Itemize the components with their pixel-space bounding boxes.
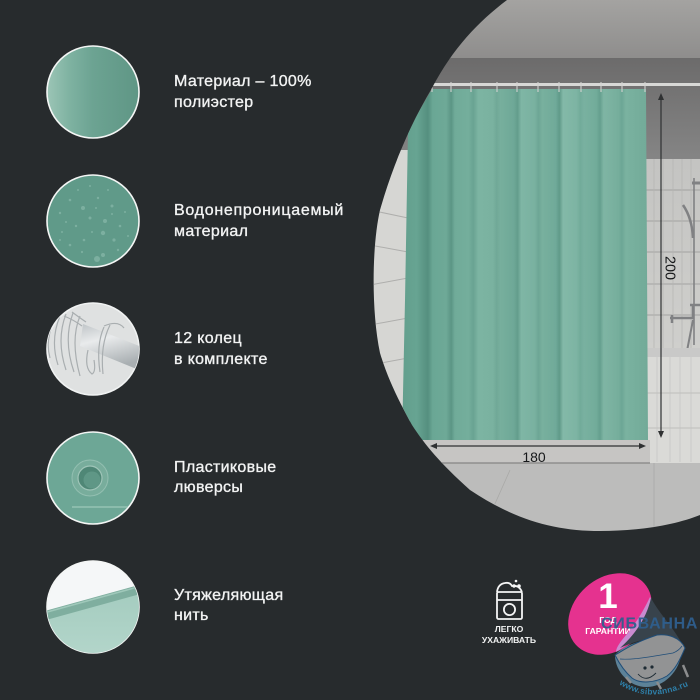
tiled wall left xyxy=(374,150,410,422)
ceiling xyxy=(450,0,700,59)
text: weighted thread: нить xyxy=(174,607,209,624)
curtain with pleats xyxy=(402,89,648,440)
text: material: полиэстер xyxy=(174,94,253,111)
logo name: СИБВАННА xyxy=(601,616,698,632)
floor xyxy=(442,463,700,531)
water drop on pink xyxy=(616,597,652,652)
icon: fabric swatch xyxy=(47,46,139,138)
text: guarantee: ГАРАНТИИ xyxy=(585,626,631,636)
icon: plastic eyelet xyxy=(47,432,139,524)
text: eyelets: люверсы xyxy=(174,479,243,496)
tub front under curtain xyxy=(400,440,650,463)
text: easy care: УХАЖИВАТЬ xyxy=(482,635,536,645)
panel: bathroom photo xyxy=(370,0,700,533)
label: 180: 180 xyxy=(522,449,546,465)
badge: 1 year guarantee xyxy=(552,556,668,672)
dimension arrow: height 200 xyxy=(658,93,678,438)
number 1: 1 xyxy=(598,577,618,616)
text: material: Материал – 100% xyxy=(174,73,312,90)
feature: rings xyxy=(47,303,268,395)
label: 200: 200 xyxy=(662,256,678,280)
text: weighted thread: Утяжеляющая xyxy=(174,587,283,604)
icon: water droplets xyxy=(47,175,139,267)
curtain rod xyxy=(432,83,700,86)
bathtub character xyxy=(615,635,688,689)
text: rings: в комплекте xyxy=(174,351,268,368)
feature: waterproof xyxy=(47,175,344,267)
feature: eyelets xyxy=(47,432,276,524)
dimension arrow: width 180 xyxy=(430,443,646,465)
icon: washing machine xyxy=(497,580,522,619)
water drop lower body xyxy=(615,640,682,687)
badge: easy care xyxy=(482,580,536,645)
tiled wall right xyxy=(646,159,700,349)
curtain rings xyxy=(432,82,645,92)
icon: weighted hem xyxy=(46,560,140,654)
text: waterproof: материал xyxy=(174,223,248,240)
text: rings: 12 колец xyxy=(174,330,242,347)
watermark: Сибванна logo xyxy=(601,597,698,695)
upper wall xyxy=(370,58,700,160)
text: guarantee: ГОД xyxy=(599,615,617,625)
text: waterproof: Водонепроницаемый xyxy=(174,202,344,219)
logo url: www.sibvanna.ru xyxy=(620,680,688,695)
text: easy care: ЛЕГКО xyxy=(495,624,524,634)
feature: weighted thread xyxy=(40,561,283,660)
pink blob xyxy=(552,556,668,672)
drop upper tint xyxy=(620,598,684,648)
text: eyelets: Пластиковые xyxy=(174,459,276,476)
shower fixture xyxy=(670,178,700,356)
bathtub xyxy=(646,348,700,463)
icon: rings on rod xyxy=(47,303,142,395)
feature: polyester material xyxy=(47,46,312,138)
